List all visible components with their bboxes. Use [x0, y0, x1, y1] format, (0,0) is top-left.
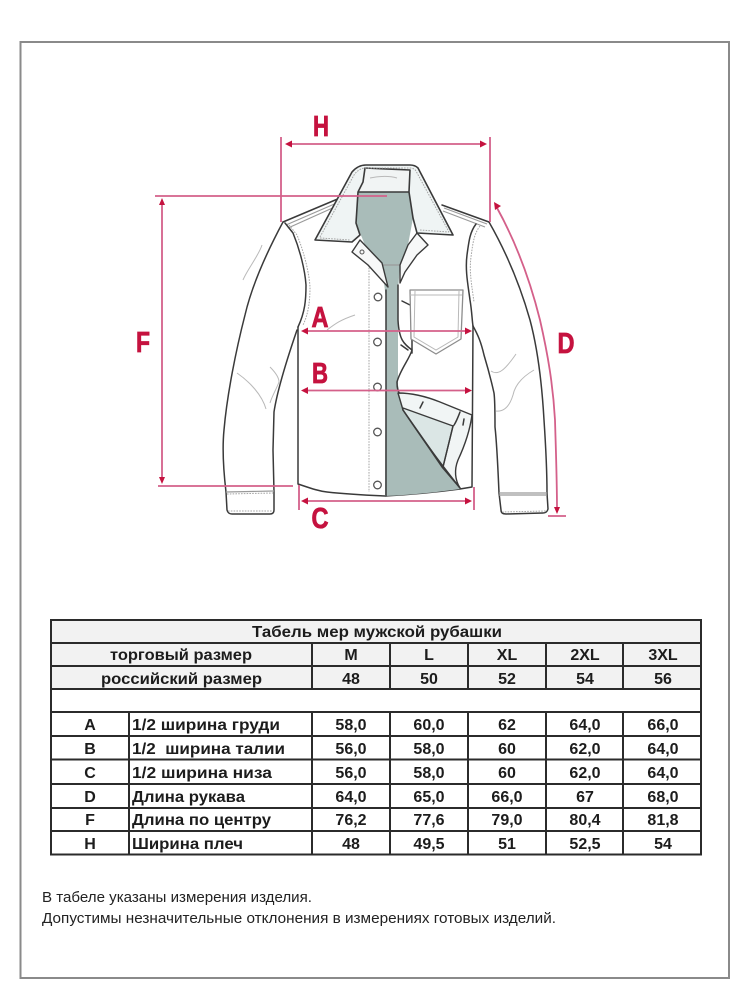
- row C: 56,0: [335, 765, 367, 782]
- measurement F: [136, 196, 387, 486]
- row F: 81,8: [647, 812, 679, 829]
- row: russian size: 52: [498, 671, 516, 688]
- row F: [85, 812, 679, 829]
- row: russian size: 50: [420, 671, 438, 688]
- row A: A: [84, 717, 96, 734]
- row H: 48: [342, 836, 360, 853]
- measurement B: B: [312, 358, 328, 390]
- measurement H: [281, 111, 490, 222]
- row H: 49,5: [413, 836, 445, 853]
- shirt illustration: [223, 165, 548, 514]
- measurement B: [301, 358, 472, 394]
- row H: H: [84, 836, 96, 853]
- table grid: [51, 620, 701, 854]
- measurement D: [494, 202, 574, 516]
- row C: C: [84, 765, 96, 782]
- row H: 52,5: [569, 836, 601, 853]
- row B: 64,0: [647, 741, 679, 758]
- row A: 62: [498, 717, 516, 734]
- table title: Табель мер мужской рубашки: [252, 624, 502, 641]
- row: russian size: российский размер: [101, 671, 262, 688]
- footnote text: В табеле указаны измерения изделия.: [42, 890, 312, 906]
- placket and front flap: [369, 262, 412, 492]
- neck inner back: [358, 168, 410, 192]
- row: trade size: 2XL: [570, 647, 600, 664]
- row B: B: [84, 741, 96, 758]
- row F: F: [85, 812, 95, 829]
- footnote text: Допустимы незначительные отклонения в измерениях готовых изделий.: [42, 911, 556, 927]
- row H: [84, 836, 672, 853]
- row D: 64,0: [335, 789, 367, 806]
- shirt right sleeve: [473, 222, 548, 514]
- row F: 76,2: [335, 812, 367, 829]
- row A: 58,0: [335, 717, 367, 734]
- row: trade size: L: [424, 647, 434, 664]
- collar: [315, 165, 453, 287]
- measurement A: A: [312, 302, 329, 334]
- grey shirt lining: [356, 176, 460, 496]
- row B: 58,0: [413, 741, 445, 758]
- row H: 54: [654, 836, 672, 853]
- row B: 62,0: [569, 741, 601, 758]
- row A: 1/2 ширина груди: [132, 717, 280, 734]
- row D: Длина рукава: [132, 789, 245, 806]
- row D: 65,0: [413, 789, 445, 806]
- row H: Ширина плеч: [132, 836, 243, 853]
- measurement A: [301, 302, 472, 334]
- shirt left sleeve: [223, 222, 297, 514]
- chest pocket: [410, 290, 463, 354]
- measurement D: D: [558, 328, 574, 360]
- measurement C: C: [312, 503, 329, 535]
- row F: 77,6: [413, 812, 445, 829]
- row H: 51: [498, 836, 516, 853]
- row A: 66,0: [647, 717, 679, 734]
- row C: 62,0: [569, 765, 601, 782]
- row: trade size: торговый размер: [110, 647, 252, 664]
- row: russian size: [101, 671, 672, 688]
- row B: [84, 741, 679, 758]
- row: russian size: 54: [576, 671, 594, 688]
- row: trade size: [110, 647, 678, 664]
- row D: 66,0: [491, 789, 523, 806]
- row B: 60: [498, 741, 516, 758]
- row: trade size: 3XL: [648, 647, 678, 664]
- row D: D: [84, 789, 96, 806]
- folded shirt corner: [398, 393, 472, 488]
- row: trade size: XL: [497, 647, 517, 664]
- row D: 67: [576, 789, 594, 806]
- row D: 68,0: [647, 789, 679, 806]
- row F: Длина по центру: [132, 812, 271, 829]
- row A: 60,0: [413, 717, 445, 734]
- row: russian size: 48: [342, 671, 360, 688]
- row F: 79,0: [491, 812, 523, 829]
- size table: [51, 620, 701, 854]
- row C: 64,0: [647, 765, 679, 782]
- row C: 58,0: [413, 765, 445, 782]
- row B: 56,0: [335, 741, 367, 758]
- row F: 80,4: [569, 812, 601, 829]
- row C: 1/2 ширина низа: [132, 765, 272, 782]
- row A: 64,0: [569, 717, 601, 734]
- row A: [84, 717, 679, 734]
- shirt body outline: [283, 198, 489, 496]
- measurement C: [299, 485, 474, 535]
- row: russian size: 56: [654, 671, 672, 688]
- row B: 1/2 ширина талии: [132, 741, 285, 758]
- row C: 60: [498, 765, 516, 782]
- table header shading: [51, 620, 701, 689]
- shirt buttons: [374, 293, 382, 489]
- row D: [84, 789, 679, 806]
- row C: [84, 765, 679, 782]
- footnote text: [42, 890, 556, 927]
- measurement F: F: [136, 327, 150, 359]
- row: trade size: M: [344, 647, 358, 664]
- measurement H: H: [313, 111, 329, 143]
